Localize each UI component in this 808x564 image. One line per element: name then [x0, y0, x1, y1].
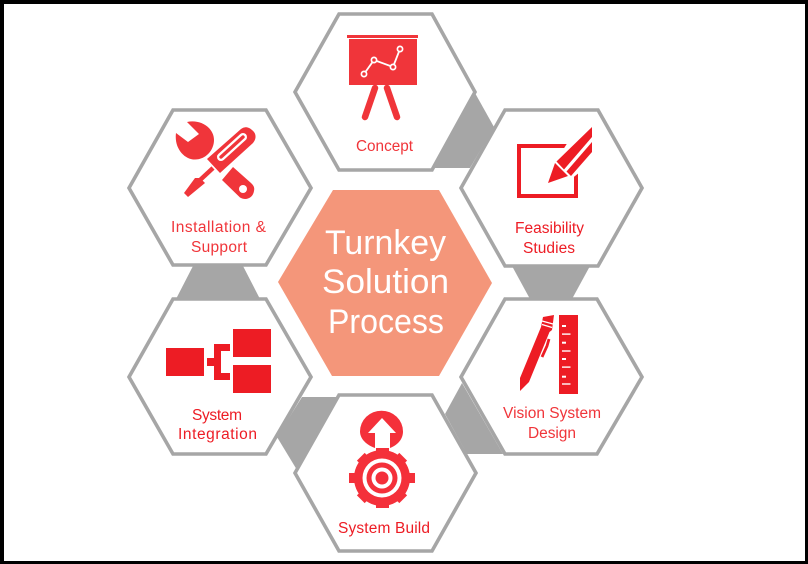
icon: wrench and screwdriver	[176, 121, 256, 199]
label: system integration: System	[192, 407, 242, 424]
label: system integration	[178, 407, 257, 443]
panel: central hexagon	[278, 190, 492, 376]
icon: arrow and gear	[349, 411, 415, 508]
title: turnkey solution process	[322, 224, 449, 341]
connector: vision system design to system build	[445, 383, 503, 454]
panel: feasibility studies	[461, 110, 642, 266]
icon: block hierarchy	[166, 329, 271, 393]
icon: checkbox with pencil	[519, 127, 592, 196]
connector: feasibility to vision system design	[512, 266, 590, 299]
label: system integration: Integration	[178, 426, 257, 443]
label: vision system design: Vision System	[503, 405, 601, 422]
title: turnkey solution process: Solution	[322, 263, 449, 301]
connector: system integration to installation	[176, 266, 260, 299]
icon: presentation board	[347, 35, 418, 117]
label: feasibility studies: Studies	[523, 240, 575, 257]
panel: system build	[295, 395, 476, 551]
label: installation and support: Installation &	[171, 219, 267, 236]
label: installation and support: Support	[191, 239, 248, 256]
connector: system build to system integration	[277, 397, 339, 470]
label: system build: System Build	[338, 520, 430, 537]
label: installation and support	[171, 219, 267, 256]
panel: vision system design	[461, 299, 642, 454]
panel: concept	[295, 14, 475, 170]
panel: system integration	[129, 299, 311, 454]
title: turnkey solution process: Process	[328, 303, 444, 341]
label: vision system design: Design	[528, 425, 576, 442]
icon: pen and ruler	[520, 315, 578, 394]
label: concept: Concept	[356, 138, 414, 155]
label: feasibility studies	[515, 220, 584, 257]
connector: concept to feasibility	[432, 93, 494, 168]
title: turnkey solution process: Turnkey	[325, 224, 446, 262]
label: vision system design	[503, 405, 601, 442]
label: feasibility studies: Feasibility	[515, 220, 584, 237]
panel: installation and support	[129, 110, 311, 265]
